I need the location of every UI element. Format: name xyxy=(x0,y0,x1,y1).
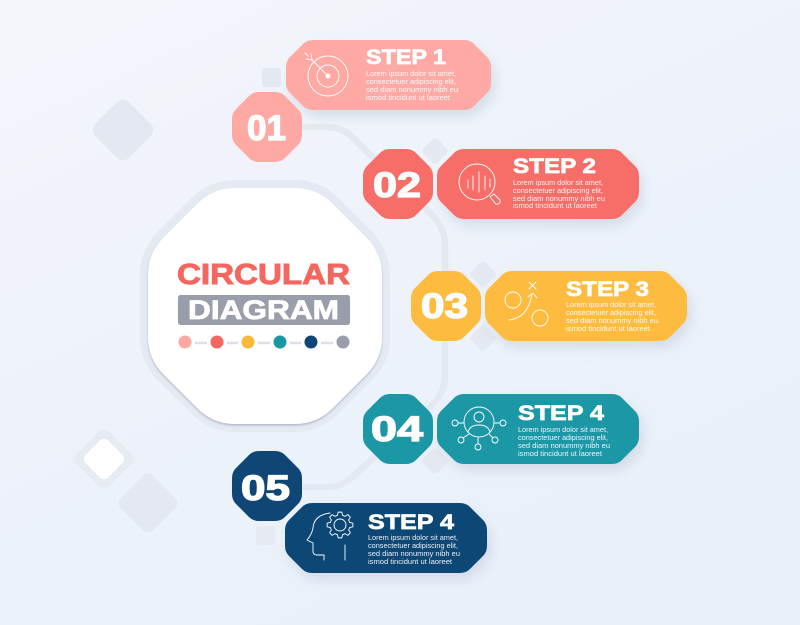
connector line xyxy=(300,127,445,487)
step 2 text: consectetuer adipiscing elit, xyxy=(513,186,603,195)
badge 01 xyxy=(232,92,302,162)
decorative diamond large top left xyxy=(89,96,157,164)
step 3 text xyxy=(566,300,658,333)
step 5 text xyxy=(368,533,460,566)
step 4 text xyxy=(518,425,610,458)
step 5 text: consectetuer adipiscing elit, xyxy=(368,541,458,550)
decorative diamond lower left xyxy=(115,470,181,536)
badge 04 xyxy=(363,394,433,464)
decorative diamond below badge 03 xyxy=(469,324,497,352)
step 4 text: consectetuer adipiscing elit, xyxy=(518,433,608,442)
icon: strategy play xyxy=(505,282,548,326)
step 2 text: sed diam nonummy nibh eu xyxy=(513,194,605,203)
badge 05 xyxy=(232,451,302,521)
step 2 heading: STEP 2 xyxy=(513,155,596,178)
step 3 text: ismod tincidunt ut laoreet xyxy=(566,324,650,333)
step 1 text: ismod tincidunt ut laoreet xyxy=(366,93,450,102)
badge 03: 03 xyxy=(421,287,468,326)
step 2 text: ismod tincidunt ut laoreet xyxy=(513,201,597,210)
step 2 panel xyxy=(437,149,639,219)
step 3 text: sed diam nonummy nibh eu xyxy=(566,316,658,325)
icon: people network xyxy=(452,407,506,450)
step 3 panel xyxy=(485,271,687,341)
step 5 panel xyxy=(285,503,487,573)
badge 05: 05 xyxy=(241,469,290,508)
step 3 text: consectetuer adipiscing elit, xyxy=(566,308,656,317)
step 1 heading: STEP 1 xyxy=(366,46,446,69)
central octagon panel xyxy=(148,188,382,424)
decorative diamond near badge 02 xyxy=(421,137,449,165)
decorative diamond below badge 04 xyxy=(421,447,449,475)
step 5 heading: STEP 4 xyxy=(368,511,454,534)
step 2 text xyxy=(513,178,605,210)
badge 04: 04 xyxy=(371,410,424,449)
step 1 text: sed diam nonummy nibh eu xyxy=(366,85,458,94)
step 4 text: sed diam nonummy nibh eu xyxy=(518,441,610,450)
decorative square near step 1 xyxy=(262,68,281,87)
badge 03 xyxy=(411,271,481,341)
step 1 text xyxy=(366,69,458,102)
badge 02: 02 xyxy=(373,166,421,205)
step 4 panel xyxy=(437,394,639,464)
badge 01: 01 xyxy=(247,109,286,148)
badge 02 xyxy=(363,149,433,219)
step 4 text: Lorem ipsum dolor sit amet, xyxy=(518,425,608,434)
title: circular: CIRCULAR xyxy=(177,259,350,291)
decorative diamond framed white xyxy=(71,426,137,492)
step 2 text: Lorem ipsum dolor sit amet, xyxy=(513,178,603,187)
icon: head with gear xyxy=(307,512,353,560)
icon: magnifier with chart xyxy=(459,164,500,204)
step 3 heading: STEP 3 xyxy=(566,278,649,301)
step 5 text: sed diam nonummy nibh eu xyxy=(368,549,460,558)
step 3 text: Lorem ipsum dolor sit amet, xyxy=(566,300,656,309)
decorative diamond above badge 03 xyxy=(469,260,497,288)
title: diagram: DIAGRAM xyxy=(188,295,339,325)
step 5 text: Lorem ipsum dolor sit amet, xyxy=(368,533,458,542)
step 5 text: ismod tincidunt ut laoreet xyxy=(368,557,452,566)
icon: target xyxy=(305,53,348,96)
step 4 heading: STEP 4 xyxy=(518,402,604,425)
colour dots row xyxy=(178,336,350,348)
decorative square near step 5 xyxy=(256,526,275,545)
step 4 text: ismod tincidunt ut laoreet xyxy=(518,449,602,458)
step 1 panel xyxy=(286,40,491,110)
step 1 text: consectetuer adipiscing elit, xyxy=(366,77,456,86)
step 1 text: Lorem ipsum dolor sit amet, xyxy=(366,69,456,78)
